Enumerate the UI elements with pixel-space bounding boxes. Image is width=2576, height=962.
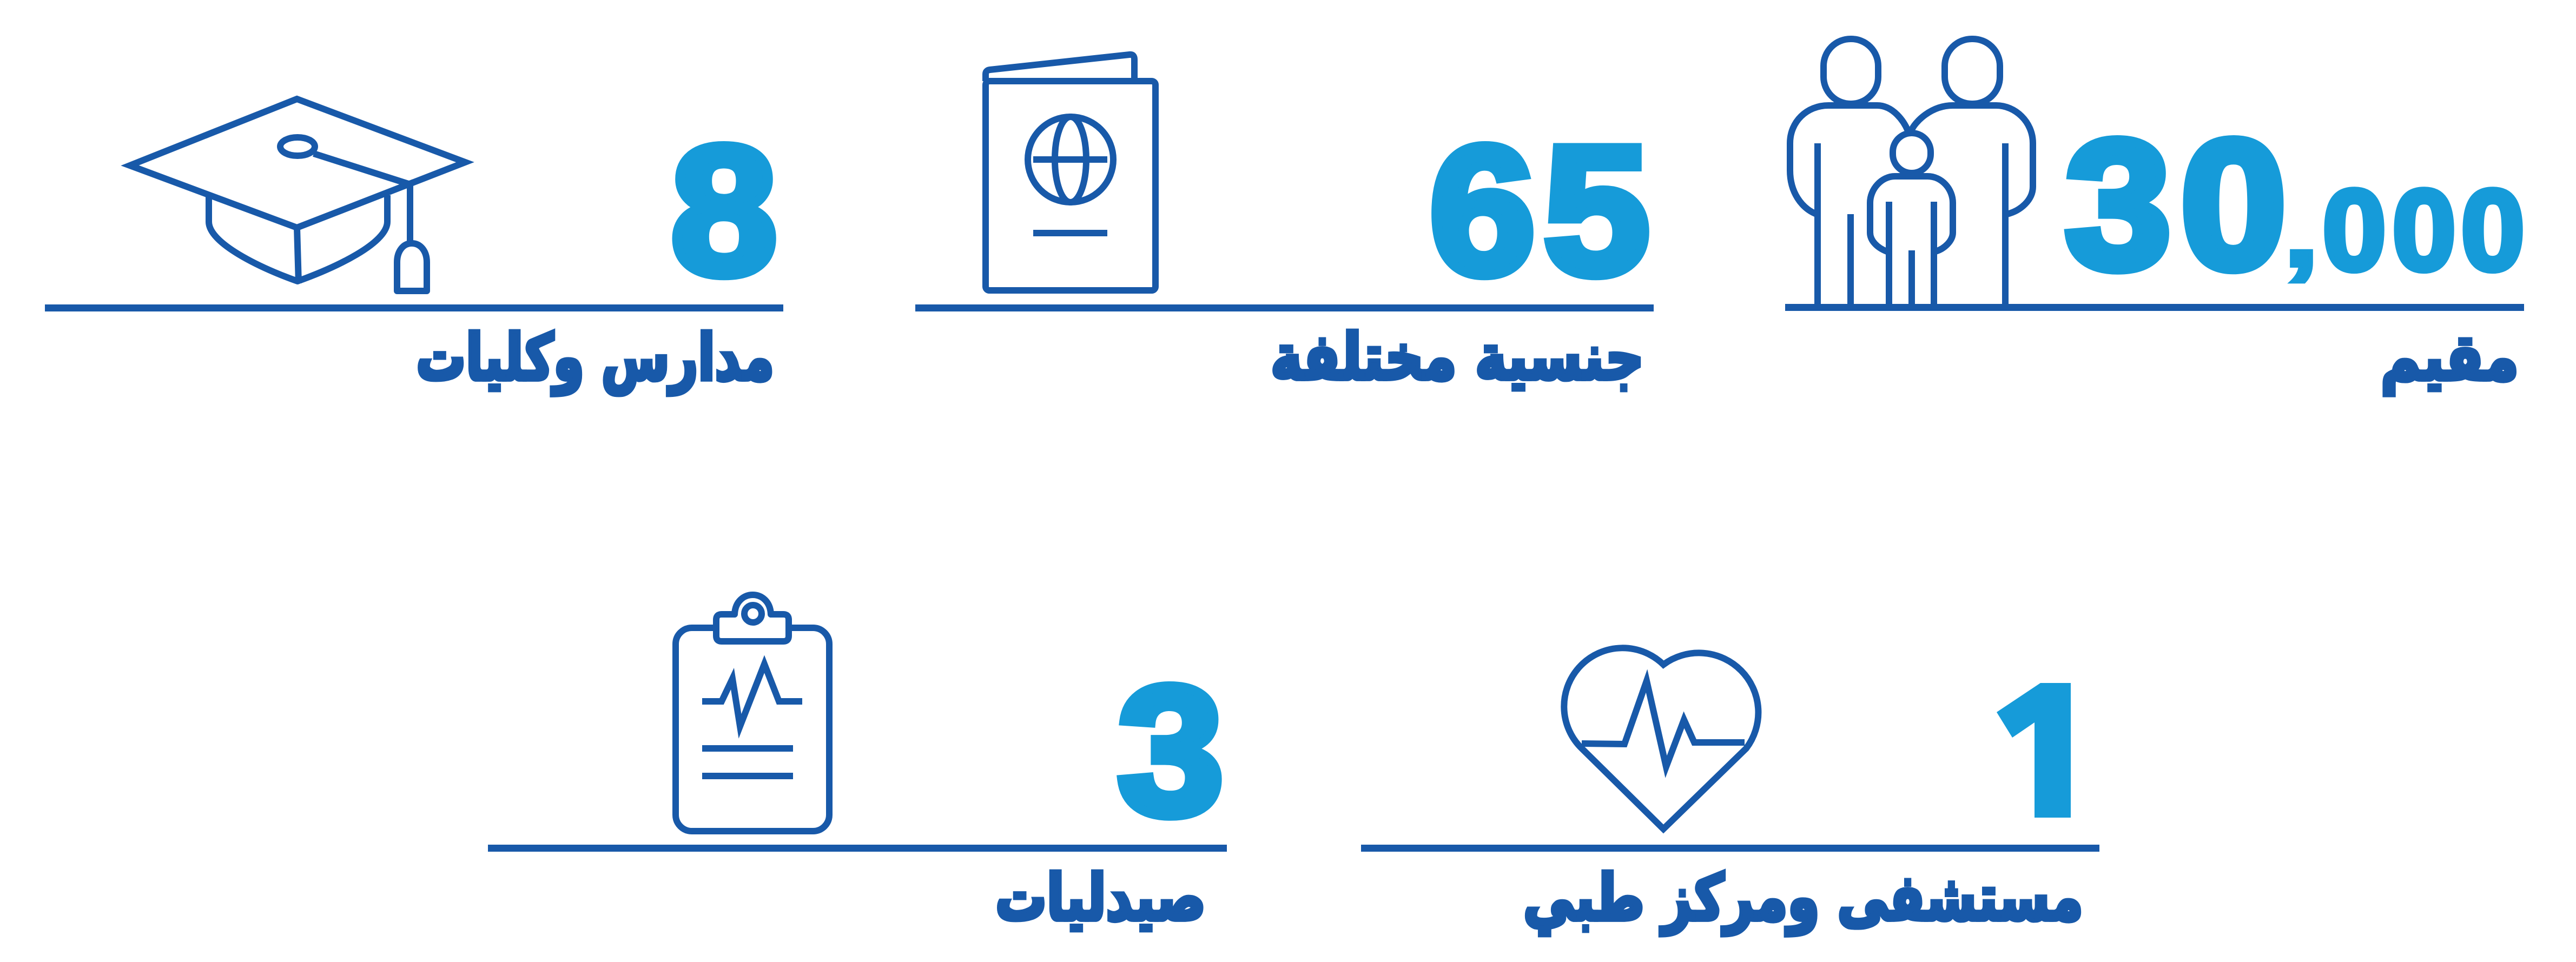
label: hospital: مستشفى ومركز طبي	[1523, 861, 2083, 936]
number: 8: 8	[671, 109, 777, 313]
icon: clipboard	[676, 595, 829, 831]
icon: graduation cap	[130, 99, 465, 291]
icon: passport	[986, 55, 1155, 290]
divider line	[915, 304, 1654, 311]
panel: hospital	[1361, 645, 2099, 938]
divider line	[488, 845, 1227, 852]
panel: pharmacies	[488, 595, 1227, 936]
divider line	[45, 304, 783, 311]
number: 1	[1997, 683, 2071, 818]
number: 30,000: ,	[2283, 173, 2320, 288]
label: schools: مدارس وكليات	[416, 321, 774, 395]
number: 3: 3	[1118, 649, 1224, 853]
label: nationalities: جنسية مختلفة	[1271, 320, 1644, 394]
divider line	[1361, 845, 2099, 852]
divider line	[1785, 304, 2524, 311]
panel: schools	[45, 99, 783, 395]
number: 30,000	[2065, 103, 2525, 307]
label: pharmacies: صيدليات	[995, 861, 1206, 936]
number: 30,000: 30	[2065, 103, 2287, 307]
icon: family	[1790, 39, 2033, 304]
number: 1: 1	[1991, 606, 2103, 871]
icon: heart with pulse	[1564, 648, 1758, 829]
label: residents: مقيم	[2381, 320, 2519, 395]
panel: nationalities	[915, 55, 1654, 394]
number: 30,000: 000	[2322, 166, 2525, 295]
panel: residents	[1785, 39, 2525, 395]
number: 65: 65	[1430, 109, 1649, 313]
